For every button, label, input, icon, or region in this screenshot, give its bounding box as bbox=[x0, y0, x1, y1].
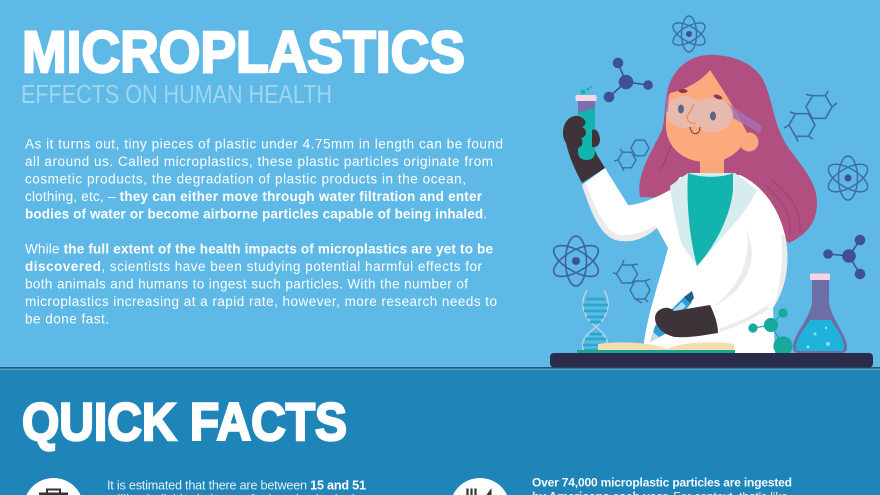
heading: quick facts: QUICK FACTS bbox=[22, 393, 347, 452]
icon: atom right bbox=[824, 156, 872, 200]
illustration: scientist in lab bbox=[549, 16, 873, 368]
icon: hexagons lower bbox=[613, 260, 650, 303]
fact 1 icon: briefcase bbox=[24, 478, 84, 495]
icon: molecule right bbox=[824, 236, 864, 278]
coat shading bbox=[582, 183, 787, 332]
flask bbox=[793, 274, 847, 353]
lab desk bbox=[550, 353, 873, 368]
pen bbox=[650, 291, 694, 342]
neck bbox=[700, 155, 724, 179]
icon: hexagons small bbox=[614, 140, 649, 171]
intro text block bbox=[25, 136, 503, 326]
safety goggles bbox=[666, 95, 762, 133]
glove on pen bbox=[655, 305, 718, 337]
ear bbox=[740, 132, 758, 152]
title: MICROPLASTICS bbox=[22, 20, 465, 85]
green molecule bbox=[749, 309, 792, 355]
lab coat bbox=[582, 168, 787, 353]
intro text block: discovered, scientists have been studying potential harmful effects for bbox=[25, 259, 482, 274]
glove fingers bbox=[563, 116, 600, 148]
intro text block: bodies of water or become airborne particles capable of being inhaled. bbox=[25, 206, 487, 222]
face bbox=[666, 70, 747, 162]
coat collar bbox=[670, 173, 757, 266]
intro text block: microplastics increasing at a rapid rate, however, more research needs to bbox=[25, 294, 497, 309]
intro text block: clothing, etc, – they can either move through water filtration and enter bbox=[25, 189, 483, 204]
hair bbox=[639, 55, 817, 243]
intro text block: While the full extent of the health impacts of microplastics are yet to be bbox=[25, 242, 493, 256]
intro text block: As it turns out, tiny pieces of plastic under 4.75mm in length can be found bbox=[25, 136, 503, 152]
glove palm bbox=[565, 138, 605, 183]
intro text block: both animals and humans to ingest such particles. With the number of bbox=[25, 276, 468, 292]
icon: atom top bbox=[670, 16, 708, 52]
subtitle: EFFECTS ON HUMAN HEALTH bbox=[21, 81, 332, 109]
teal shirt bbox=[687, 173, 733, 266]
test tube bbox=[576, 86, 596, 160]
icon: hexagons right bbox=[784, 91, 837, 142]
intro text block: be done fast. bbox=[25, 312, 109, 326]
icon: atom left bbox=[549, 236, 603, 286]
intro text block: all around us. Called microplastics, these plastic particles originate from bbox=[25, 154, 493, 169]
icon: dna bbox=[583, 290, 608, 352]
fact 2 text: Over 74,000 microplastic particles are ingested bbox=[532, 476, 792, 490]
icon: molecule top bbox=[604, 58, 652, 102]
facial features bbox=[678, 89, 723, 134]
fact 2 icon: fork and knife bbox=[450, 478, 510, 495]
open book bbox=[577, 342, 735, 354]
intro text block: cosmetic products, the degradation of plastic products in the ocean, bbox=[25, 172, 466, 186]
fact 1 text: It is estimated that there are between 15 and 51 bbox=[107, 478, 366, 492]
